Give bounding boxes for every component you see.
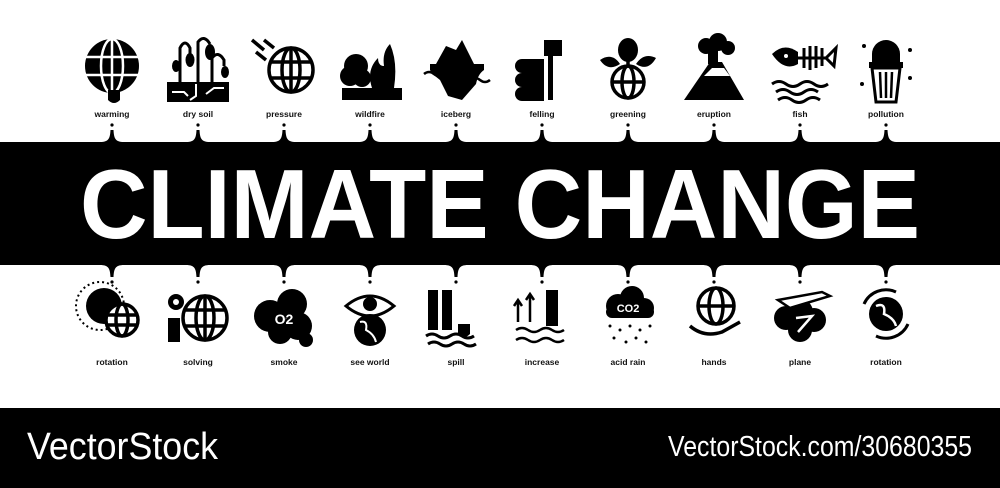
icon: see world: see world (350, 357, 390, 367)
icon: felling: felling (529, 109, 555, 119)
icon: greening: greening (610, 109, 646, 119)
icon: hands (690, 288, 740, 367)
icon: pressure (252, 40, 313, 119)
icon: rotation (bottom 10): rotation (870, 357, 902, 367)
icon: wildfire: wildfire (354, 109, 385, 119)
icon: rotation (bottom 1) (76, 282, 139, 367)
icon: fish: fish (792, 109, 808, 119)
title: CLIMATE CHANGE (80, 149, 920, 259)
icon: smoke: O2 (275, 311, 294, 327)
icon: iceberg (424, 40, 490, 119)
icon: warming (85, 39, 139, 119)
icon: pollution (860, 40, 912, 119)
icon: eruption: eruption (697, 109, 731, 119)
icon: fish (772, 46, 836, 119)
icon: spill: spill (447, 357, 465, 367)
watermark: VectorStock: VectorStock (27, 426, 219, 468)
icon: dry soil (167, 38, 229, 119)
icon: acid rain (606, 286, 654, 367)
icon: solving: solving (183, 357, 213, 367)
icon: pressure: pressure (266, 109, 302, 119)
icon: wildfire (340, 44, 402, 119)
icon: hands: hands (701, 357, 727, 367)
icon: increase: increase (525, 357, 560, 367)
icon: greening (600, 38, 656, 119)
icon: see world (346, 296, 394, 367)
icon: rotation (bottom 10) (864, 290, 908, 367)
icon: acid rain: CO2 (617, 303, 639, 315)
icon: eruption (684, 33, 744, 119)
icon: warming: warming (94, 109, 129, 119)
icon: spill (426, 290, 476, 367)
icon: rotation (bottom 1): rotation (96, 357, 128, 367)
icon: solving (168, 294, 227, 367)
icon: plane (774, 292, 830, 367)
title band (0, 123, 1000, 284)
icon: felling (515, 40, 562, 119)
icon: smoke: smoke (271, 357, 298, 367)
footer bar (0, 408, 1000, 488)
icon: increase (514, 290, 564, 367)
icon: dry soil: dry soil (183, 109, 213, 119)
icon: acid rain: acid rain (611, 357, 645, 367)
icon: pollution: pollution (868, 109, 904, 119)
icon: iceberg: iceberg (441, 109, 471, 119)
icon: smoke (254, 289, 313, 367)
icon: plane: plane (789, 357, 811, 367)
